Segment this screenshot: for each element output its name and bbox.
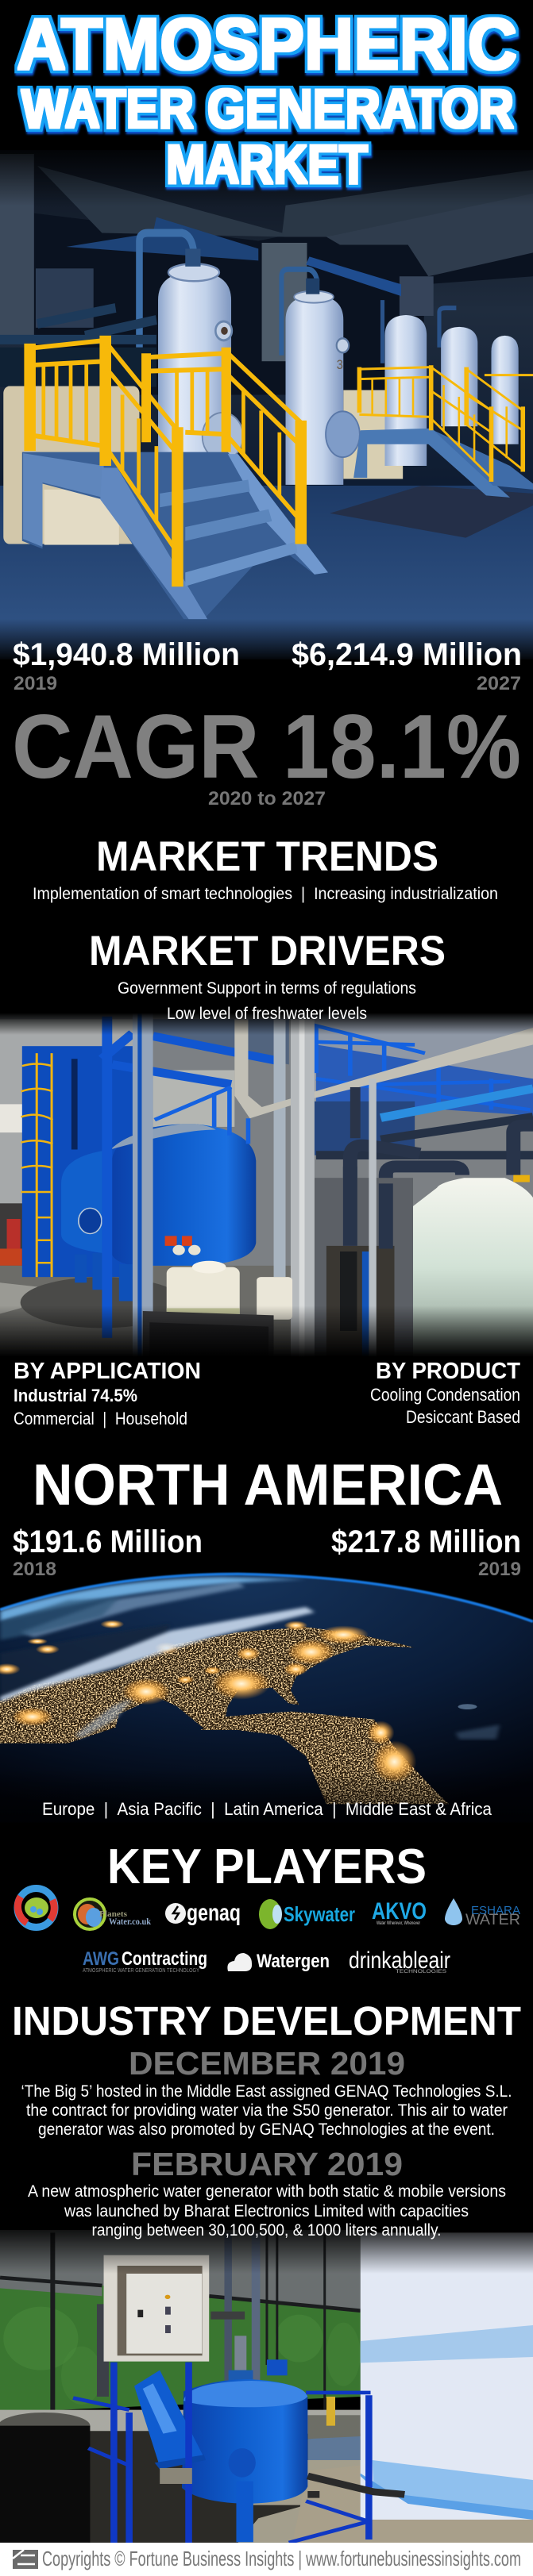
development: february 2019: was launched by Bharat Electronics Limited with capacities [64,2202,469,2220]
by application: Industrial 74.5% [14,1386,137,1405]
icon: yellow stair railings [30,336,533,586]
development: february 2019 [28,2146,506,2240]
icon: eshara water logo [445,1898,520,1928]
icon: akvo logo: Water Wherever, Whenever [377,1921,420,1926]
icon: fortune business insights logo [13,2550,38,2569]
north america heading: NORTH AMERICA [33,1453,503,1517]
icon: skywater logo: Skywater [284,1902,355,1926]
market size stats: $6,214.9 Million [292,637,522,672]
north america stats [13,1524,521,1580]
photo: industrial plant with silver tanks and yellow stairs [0,150,533,659]
north america stats: $217.8 Million [331,1524,521,1559]
icon: skywater logo [259,1899,355,1929]
industry development heading: INDUSTRY DEVELOPMENT [12,1998,521,2043]
market size stats [13,637,522,694]
development: february 2019: FEBRUARY 2019 [131,2146,403,2182]
icon: awg contracting logo: ATMOSPHERIC WATER GENERATION TECHNOLOGY [83,1968,199,1974]
development: december 2019: the contract for providing water via the S50 generator. This air to water [26,2101,508,2120]
by application: Commercial | Household [14,1409,187,1428]
icon: planets water logo: Water.co.uk [109,1916,151,1927]
icon: awg contracting logo [83,1948,207,1974]
development: december 2019: DECEMBER 2019 [129,2045,405,2082]
icon: watergen logo [227,1951,330,1972]
icon: genaq logo [165,1900,241,1926]
other regions: Europe | Asia Pacific | Latin America | Middle East & Africa [42,1799,492,1819]
by product: BY PRODUCT [376,1359,520,1384]
title [17,4,517,195]
CAGR callout: 2020 to 2027 [208,788,326,809]
photo: industrial plant with silver tanks and yellow stairs: 3 [337,358,343,372]
photo: earth at night showing north america [0,1574,533,1849]
photo: blue filter tank in greenhouse [0,2230,533,2543]
north america stats: $191.6 Million [13,1524,203,1559]
icon: ring leaf logo [17,1889,55,1927]
development: december 2019 [21,2045,512,2139]
north america stats: 2018 [13,1559,56,1580]
market trends [33,833,498,903]
north america stats: 2019 [478,1559,521,1580]
icon: planets water logo: Planets [99,1909,128,1919]
icon: awg contracting logo: AWG [83,1948,119,1970]
development: february 2019: ranging between 30,100,500, & 1000 liters annually. [92,2221,442,2240]
icon: eshara water logo: WATER [465,1912,520,1928]
market drivers: Low level of freshwater levels [167,1005,367,1023]
market trends: MARKET TRENDS [96,833,438,880]
title: MARKET [166,133,368,195]
market size stats: 2019 [14,673,57,694]
market drivers: MARKET DRIVERS [89,928,446,975]
key player logos [17,1889,520,1974]
icon: eshara water logo: ESHARA [471,1904,520,1917]
by product [370,1359,520,1427]
icon: genaq logo: genaq [187,1900,241,1926]
icon: watergen logo: Watergen [257,1951,330,1972]
market size stats: 2027 [477,673,521,694]
by application [14,1359,201,1428]
development: december 2019: generator was also promoted by GENAQ Technologies at the event. [38,2120,495,2139]
by application: BY APPLICATION [14,1359,201,1384]
market size stats: $1,940.8 Million [13,637,240,672]
market drivers [89,928,446,1023]
photo: water treatment plant with blue tanks [0,1008,533,1356]
market drivers: Government Support in terms of regulations [118,979,416,998]
icon: drinkableair logo: TECHNOLOGIES [396,1970,446,1974]
footer bar [0,2543,533,2576]
icon: drinkableair logo: drinkableair [349,1947,450,1974]
key players heading: KEY PLAYERS [107,1840,427,1894]
icon: akvo logo: AKVO [372,1898,427,1924]
development: february 2019: A new atmospheric water generator with both static & mobile versions [28,2182,506,2201]
icon: planets water logo [75,1899,151,1929]
icon: awg contracting logo: Contracting [122,1948,207,1970]
market trends: Implementation of smart technologies | Increasing industrialization [33,885,498,903]
